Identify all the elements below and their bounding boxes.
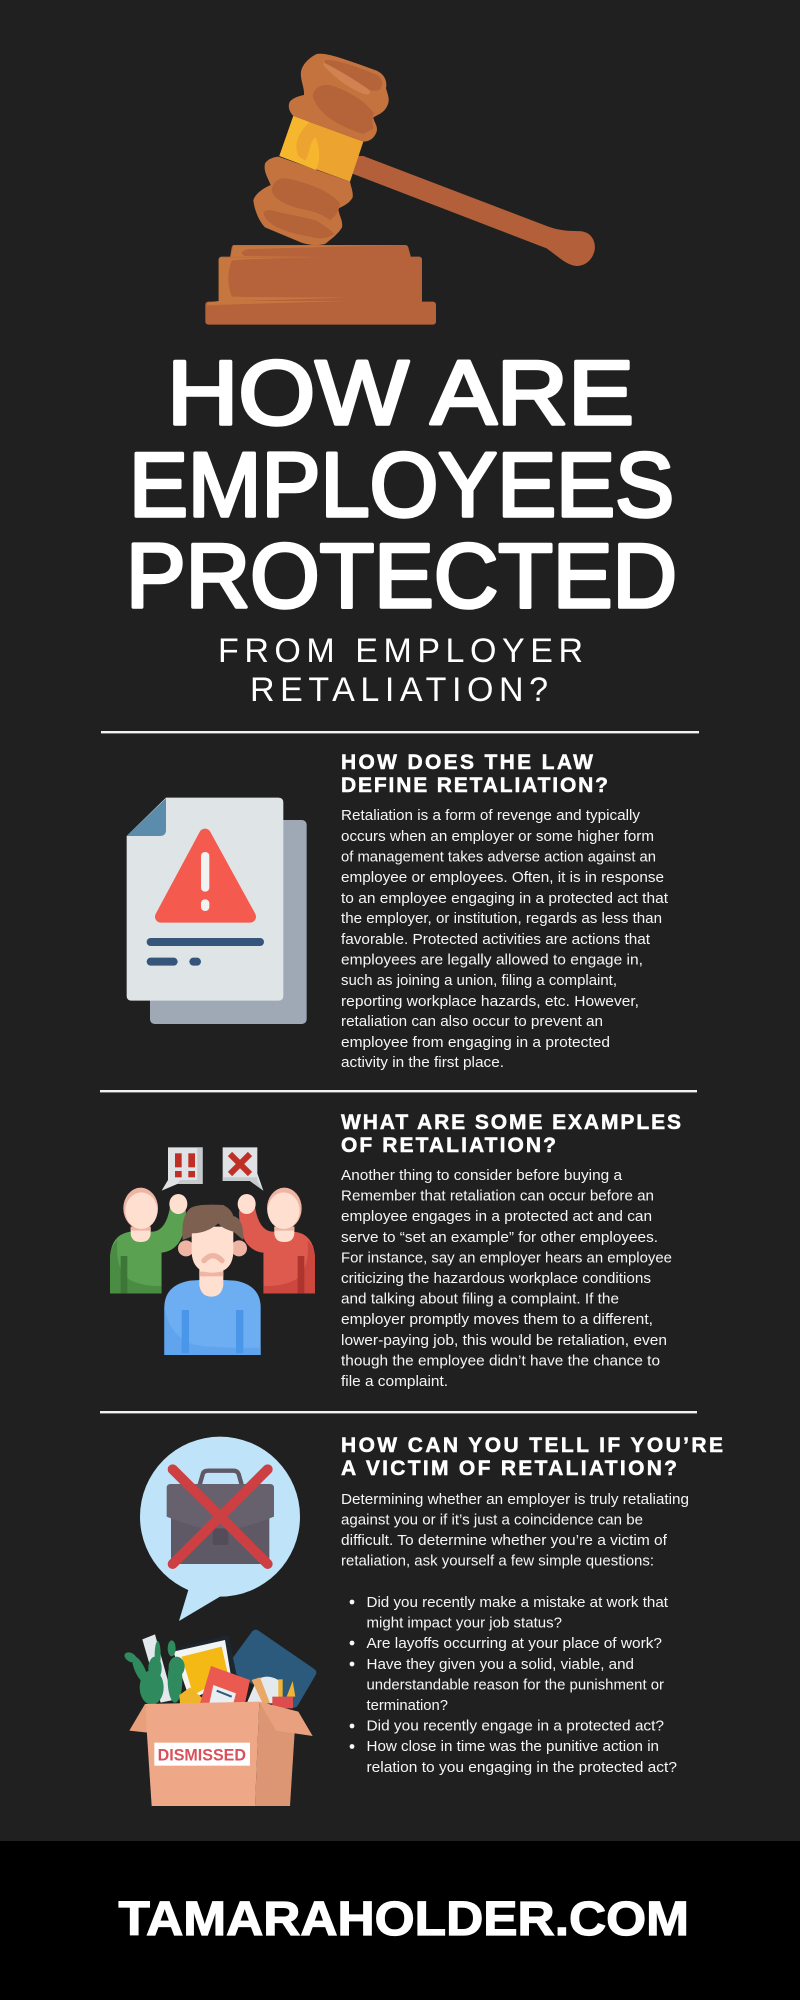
- icon: crossed-out briefcase bubble: [140, 1437, 300, 1621]
- heading: A VICTIM OF RETALIATION?: [341, 1457, 677, 1480]
- text block: employee engages in a protected act and can: [341, 1208, 652, 1225]
- footer band: [0, 1841, 800, 2000]
- text block: employees are legally allowed to engage in,: [341, 952, 643, 968]
- text block: against you or if it’s just a coincidence can be: [341, 1512, 643, 1528]
- bulleted list: Are layoffs occurring at your place of work?: [366, 1635, 662, 1652]
- text block: For instance, say an employer hears an employee: [341, 1249, 672, 1266]
- panel: what are some examples of retaliation: [110, 1111, 681, 1390]
- bulleted list: How close in time was the punitive action in: [366, 1738, 659, 1755]
- title: PROTECTED: [126, 526, 677, 627]
- text block: favorable. Protected activities are actions that: [341, 931, 651, 948]
- text block: [341, 1167, 672, 1390]
- text block: reporting workplace hazards, etc. However,: [341, 993, 639, 1010]
- text block: though the employee didn’t have the chance to: [341, 1352, 660, 1369]
- subtitle: [218, 632, 583, 709]
- subtitle: RETALIATION?: [250, 671, 548, 709]
- text block: difficult. To determine whether you’re a victim of: [341, 1532, 668, 1549]
- icon: gavel: [205, 54, 595, 325]
- text block: and talking about filing a complaint. If the: [341, 1291, 619, 1308]
- heading: HOW DOES THE LAW: [341, 751, 593, 774]
- icon: left coworker: [110, 1188, 187, 1293]
- bulleted list: [350, 1594, 677, 1776]
- title: [126, 343, 677, 627]
- text block: employee or employees. Often, it is in response: [341, 869, 664, 886]
- icon: cactus: [123, 1640, 185, 1705]
- bulleted list: termination?: [366, 1697, 448, 1714]
- bulleted list: relation to you engaging in the protected act?: [366, 1759, 677, 1776]
- text block: such as joining a union, filing a complaint,: [341, 972, 617, 989]
- bulleted list: might impact your job status?: [366, 1615, 562, 1632]
- text block: file a complaint.: [341, 1373, 448, 1390]
- heading: DEFINE RETALIATION?: [341, 774, 608, 797]
- text block: occurs when an employer or some higher form: [341, 828, 654, 845]
- text block: lower-paying job, this would be retaliation, even: [341, 1332, 667, 1349]
- panel: how does the law define retaliation: [127, 751, 669, 1071]
- text block: serve to “set an example” for other employees.: [341, 1229, 658, 1246]
- bulleted list: understandable reason for the punishment or: [366, 1676, 664, 1693]
- text block: to an employee engaging in a protected act that: [341, 890, 669, 907]
- label: dismissed: DISMISSED: [158, 1746, 246, 1765]
- text block: activity in the first place.: [341, 1054, 504, 1071]
- gavel base: [205, 245, 436, 325]
- text block: employee from engaging in a protected: [341, 1034, 610, 1051]
- text block: Another thing to consider before buying a: [341, 1167, 623, 1184]
- text block: of management takes adverse action against an: [341, 848, 656, 866]
- text block: Remember that retaliation can occur before an: [341, 1188, 654, 1205]
- text block: [341, 1491, 689, 1570]
- text block: retaliation, ask yourself a few simple questions:: [341, 1552, 654, 1570]
- heading: OF RETALIATION?: [341, 1134, 556, 1157]
- text block: Retaliation is a form of revenge and typically: [341, 807, 640, 824]
- text block: criticizing the hazardous workplace conditions: [341, 1270, 651, 1287]
- icon: dismissed box: [123, 1634, 313, 1806]
- heading: WHAT ARE SOME EXAMPLES: [341, 1111, 681, 1134]
- text block: Determining whether an employer is truly retaliating: [341, 1491, 689, 1508]
- icon: central sad employee: [162, 1205, 263, 1355]
- subtitle: FROM EMPLOYER: [218, 632, 583, 670]
- icon: warning document: [127, 798, 307, 1024]
- icon: right coworker: [238, 1188, 315, 1293]
- heading: [341, 1434, 723, 1480]
- icon: speech bubble cross: [223, 1147, 263, 1191]
- panel: how can you tell if you're a victim of retaliation: [123, 1434, 723, 1806]
- text block: [341, 807, 669, 1071]
- bulleted list: Did you recently engage in a protected act?: [366, 1718, 664, 1735]
- title: HOW ARE: [167, 343, 634, 444]
- heading: [341, 1111, 681, 1157]
- heading: [341, 751, 608, 797]
- title: EMPLOYEES: [129, 435, 674, 536]
- text block: retaliation can also occur to prevent an: [341, 1013, 603, 1030]
- footer website: TAMARAHOLDER.COM: [118, 1893, 689, 1946]
- text block: employer promptly moves them to a different,: [341, 1311, 653, 1328]
- heading: HOW CAN YOU TELL IF YOU’RE: [341, 1434, 723, 1457]
- bulleted list: Did you recently make a mistake at work that: [366, 1594, 669, 1611]
- icon: speech bubble exclamation: [162, 1147, 203, 1191]
- icon: upset employees: [110, 1147, 315, 1355]
- text block: the employer, or institution, regards as less than: [341, 910, 662, 927]
- bulleted list: Have they given you a solid, viable, and: [366, 1656, 634, 1673]
